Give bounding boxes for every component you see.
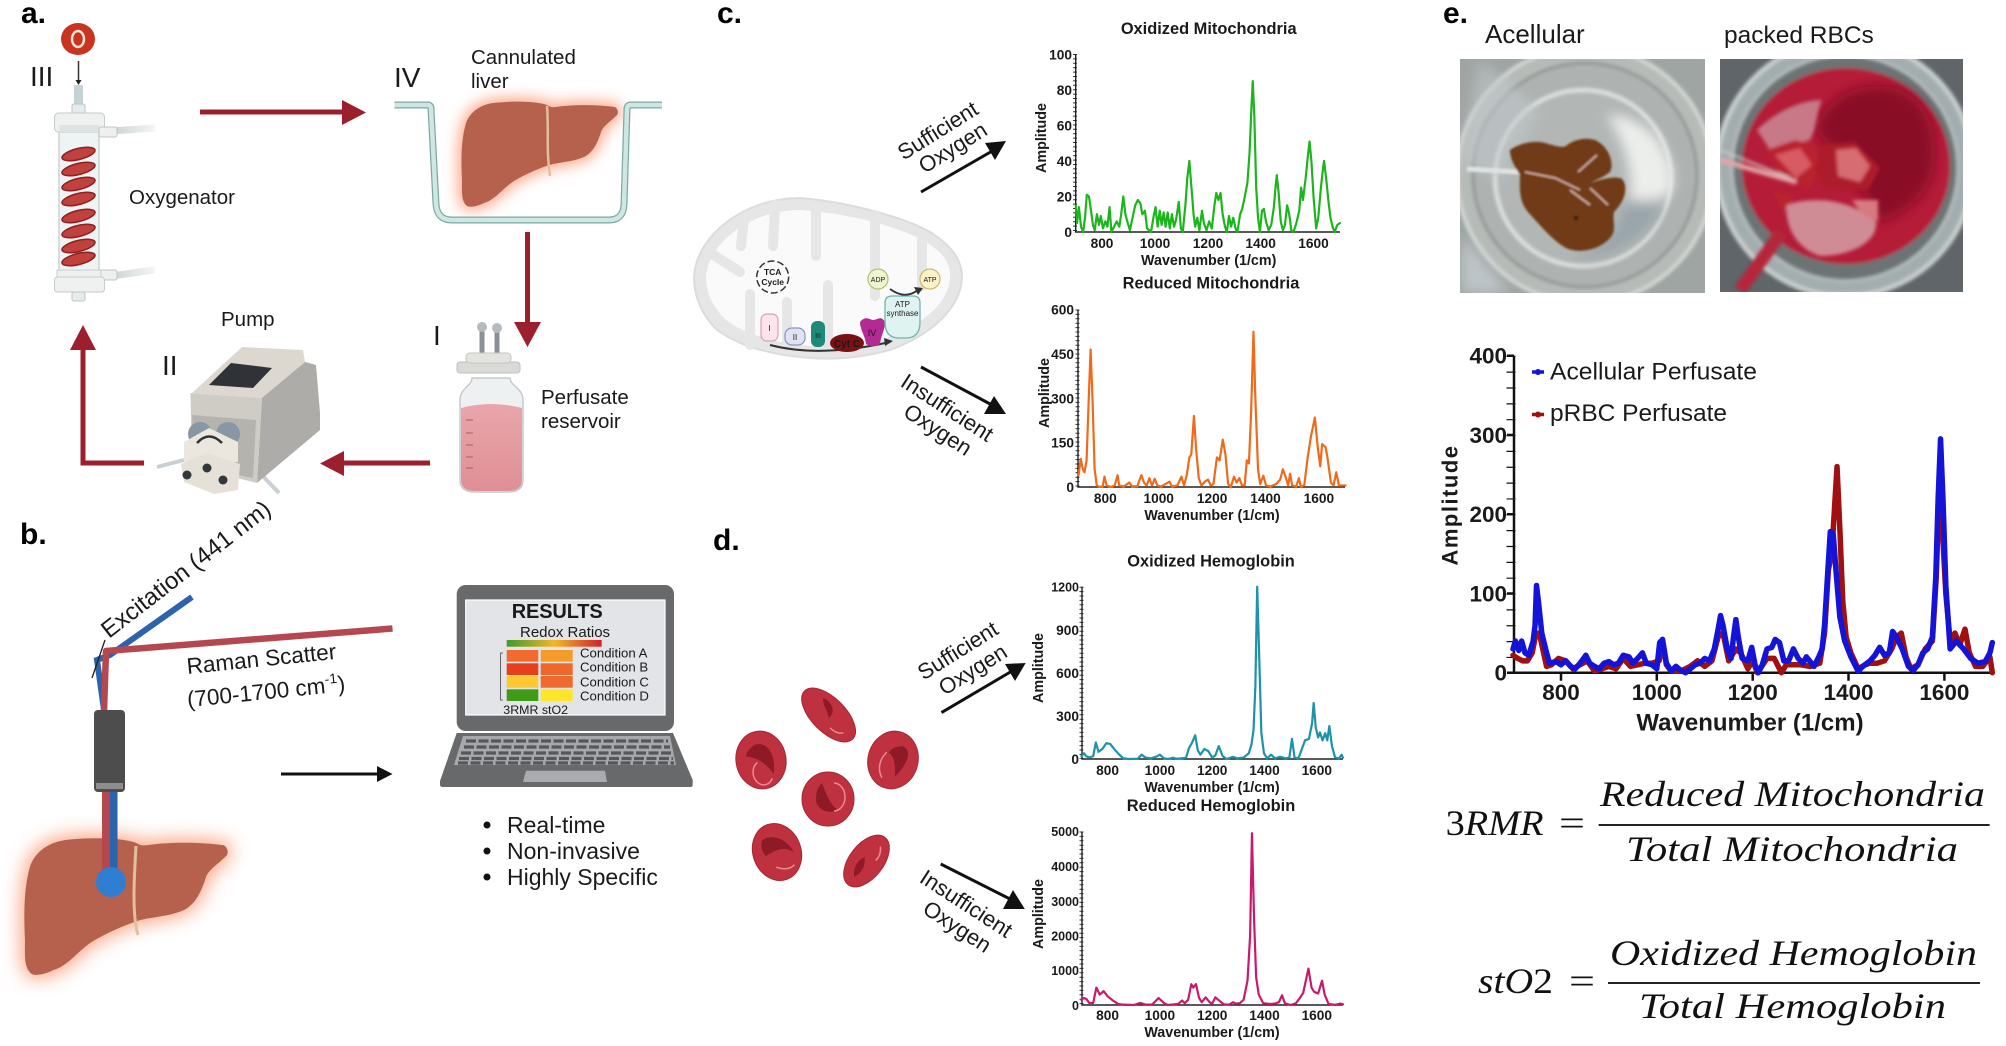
label Raman scatter: Raman Scatter bbox=[185, 639, 338, 679]
legend: Acellular Perfusate bbox=[1550, 358, 1757, 385]
chart: oxidized hemoglobin spectrum: 1200 bbox=[1197, 763, 1228, 778]
arrow: liver to reservoir bbox=[514, 232, 541, 347]
bullet list: Real-time bbox=[507, 812, 605, 838]
label sufficient oxygen: Oxygen bbox=[934, 639, 1012, 700]
panel d: hemoglobin spectra bbox=[713, 524, 1343, 1041]
bullet list: Highly Specific bbox=[507, 864, 658, 890]
panel a: perfusion circuit bbox=[21, 0, 662, 494]
chart: reduced hemoglobin spectrum: 800 bbox=[1096, 1008, 1119, 1023]
heatmap row labels bbox=[580, 645, 649, 704]
ADP to ATP arrow bbox=[890, 287, 923, 295]
label pump: Pump bbox=[221, 308, 275, 331]
chart: reduced hemoglobin spectrum: 1400 bbox=[1249, 1008, 1280, 1023]
icon: oxygenator column bbox=[54, 85, 155, 301]
bullet list bbox=[484, 812, 658, 890]
y tick labels: 0 bbox=[1494, 661, 1507, 686]
formula: stO2: Oxidized Hemoglobin bbox=[1610, 933, 1977, 973]
chart: reduced mitochondria spectrum: 450 bbox=[1051, 347, 1074, 362]
chart: oxidized mitochondria spectrum: 20 bbox=[1057, 190, 1072, 204]
chart: reduced hemoglobin spectrum: Wavenumber (1/cm) bbox=[1144, 1025, 1280, 1041]
heatmap bbox=[500, 650, 573, 701]
chart: reduced hemoglobin spectrum: 4000 bbox=[1051, 860, 1079, 874]
arrow: insufficient oxygen bbox=[921, 367, 1006, 414]
chart: reduced hemoglobin spectrum: 1200 bbox=[1197, 1008, 1228, 1023]
chart: reduced hemoglobin spectrum: 2000 bbox=[1051, 930, 1079, 944]
heatmap row labels: Condition B bbox=[580, 660, 648, 675]
label perfusate reservoir: Perfusate bbox=[541, 386, 629, 409]
chart: oxidized hemoglobin spectrum: 1600 bbox=[1302, 763, 1332, 778]
bullet list: Non-invasive bbox=[507, 838, 640, 864]
heading acellular: Acellular bbox=[1485, 19, 1585, 49]
y tick labels: 400 bbox=[1469, 344, 1507, 369]
arrow: sufficient oxygen bbox=[921, 141, 1006, 192]
panel label d: d. bbox=[713, 524, 740, 557]
x tick labels: 1400 bbox=[1823, 680, 1874, 705]
results heading: RESULTS bbox=[512, 601, 603, 623]
heatmap row labels: Condition A bbox=[580, 645, 648, 660]
chart: reduced hemoglobin spectrum: 0 bbox=[1072, 999, 1079, 1013]
ATP synthase: synthase bbox=[886, 309, 919, 318]
arrow: oxygenator to liver bbox=[200, 100, 366, 125]
formula: stO2: stO2 bbox=[1478, 961, 1553, 1001]
icon: peristaltic pump bbox=[157, 347, 320, 494]
heatmap row labels: Condition C bbox=[580, 674, 649, 689]
formula: stO2 bbox=[1478, 933, 1980, 1026]
icon: liver with probe spot bbox=[24, 792, 228, 975]
heading packed RBCs: packed RBCs bbox=[1724, 22, 1874, 49]
TCA cycle: Cycle bbox=[761, 277, 784, 287]
dark pool and reflections bbox=[1815, 86, 1935, 222]
chart: oxidized mitochondria spectrum: 1400 bbox=[1245, 236, 1276, 251]
label excitation: Excitation (441 nm) bbox=[96, 496, 276, 644]
chart: oxidized mitochondria spectrum: 0 bbox=[1064, 225, 1072, 240]
icon: tray bbox=[394, 105, 662, 220]
numeral II: II bbox=[162, 350, 178, 381]
chart: reduced hemoglobin spectrum bbox=[1031, 825, 1343, 1041]
numeral IV: IV bbox=[394, 62, 421, 93]
chart: reduced mitochondria spectrum: 1000 bbox=[1143, 491, 1174, 506]
chart: oxidized hemoglobin spectrum: 900 bbox=[1056, 623, 1079, 638]
label oxygenator: Oxygenator bbox=[129, 186, 235, 209]
y tick labels: 300 bbox=[1469, 423, 1507, 448]
chart: reduced hemoglobin spectrum: 1600 bbox=[1302, 1008, 1332, 1023]
major ticks bbox=[1507, 356, 1944, 681]
chart title: reduced mitochondria: Reduced Mitochondria bbox=[1123, 274, 1300, 292]
photo: acellular perfused liver bbox=[1460, 59, 1705, 293]
chart: oxidized mitochondria spectrum: Amplitude bbox=[1034, 103, 1050, 173]
chart: reduced hemoglobin spectrum: 1000 bbox=[1145, 1008, 1176, 1023]
arrow: insufficient oxygen bbox=[941, 864, 1025, 909]
legend bbox=[1532, 358, 1757, 427]
minor ticks bbox=[1506, 356, 1516, 673]
chart: oxidized mitochondria spectrum: 40 bbox=[1057, 154, 1072, 169]
x tick labels bbox=[1542, 680, 1969, 705]
chart: oxidized mitochondria spectrum: 60 bbox=[1057, 118, 1072, 134]
arrow: pump to oxygenator bbox=[70, 325, 144, 466]
icon: liver glow bbox=[24, 838, 228, 975]
ATP synthase bbox=[885, 296, 920, 338]
y tick labels bbox=[1469, 344, 1507, 686]
panel label b: b. bbox=[20, 518, 47, 551]
Raman scatter beam bbox=[104, 628, 392, 711]
electron transport arrow bbox=[770, 342, 890, 351]
chart: reduced mitochondria spectrum: Amplitude bbox=[1037, 358, 1053, 428]
photo: packed RBC perfused liver bbox=[1720, 59, 1963, 292]
arrow: reservoir to pump bbox=[320, 451, 430, 476]
complex III bbox=[811, 321, 825, 347]
blue series and red series bbox=[1513, 439, 1992, 673]
chart: oxidized mitochondria spectrum: 1000 bbox=[1140, 236, 1171, 251]
chart: oxidized mitochondria spectrum: 100 bbox=[1049, 48, 1072, 62]
numeral III: III bbox=[30, 61, 53, 92]
chart: oxidized mitochondria spectrum: 1600 bbox=[1298, 236, 1329, 251]
arrow: probe to laptop bbox=[281, 766, 392, 782]
heatmap row labels: Condition D bbox=[580, 689, 649, 704]
chart: reduced mitochondria spectrum: 600 bbox=[1051, 302, 1074, 318]
y tick labels: 100 bbox=[1469, 582, 1507, 606]
chart title: reduced hemoglobin: Reduced Hemoglobin bbox=[1127, 797, 1295, 815]
chart: oxidized hemoglobin spectrum: 0 bbox=[1071, 752, 1079, 767]
label cannulated liver: Cannulated bbox=[471, 46, 576, 69]
chart: oxidized mitochondria spectrum bbox=[1034, 48, 1340, 269]
chart: oxidized hemoglobin spectrum: 600 bbox=[1056, 666, 1079, 681]
TCA cycle: TCA bbox=[764, 267, 781, 277]
icon: oxygen source bbox=[61, 23, 95, 85]
x tick labels: 1000 bbox=[1632, 680, 1682, 705]
chart: reduced mitochondria spectrum: 1200 bbox=[1197, 491, 1228, 506]
chart: reduced mitochondria spectrum: Wavenumber (1/cm) bbox=[1144, 508, 1280, 524]
y axis title: Amplitude bbox=[1438, 444, 1463, 566]
chart: oxidized mitochondria spectrum: 80 bbox=[1057, 83, 1072, 98]
formula: 3RMR: Reduced Mitochondria bbox=[1599, 774, 1985, 814]
icon: probe body bbox=[94, 710, 125, 792]
x tick labels: 800 bbox=[1542, 680, 1580, 705]
complex III: III bbox=[815, 333, 821, 340]
icon: perfusate reservoir bottle bbox=[457, 322, 523, 492]
redox ratios label: Redox Ratios bbox=[520, 624, 610, 641]
chart: perfusate spectrum comparison bbox=[1438, 344, 1992, 737]
chart: oxidized hemoglobin spectrum: 800 bbox=[1096, 763, 1119, 778]
chart: reduced hemoglobin spectrum: 5000 bbox=[1051, 825, 1079, 839]
label Raman scatter: (700-1700 cm bbox=[186, 673, 326, 712]
label sufficient oxygen: Oxygen bbox=[914, 117, 992, 178]
chart: reduced mitochondria spectrum: 300 bbox=[1051, 392, 1074, 406]
ATP: ATP bbox=[923, 277, 937, 284]
icon: mitochondrion bbox=[694, 198, 962, 359]
chart title: oxidized hemoglobin: Oxidized Hemoglobin bbox=[1127, 552, 1295, 570]
label cannulated liver: liver bbox=[471, 70, 509, 93]
formula: 3RMR: Total Mitochondria bbox=[1626, 829, 1958, 869]
formula: stO2: = bbox=[1569, 961, 1595, 1001]
label insufficient oxygen: Insufficient bbox=[897, 369, 998, 447]
label insufficient oxygen: Oxygen bbox=[919, 895, 996, 958]
complex II bbox=[785, 328, 805, 345]
label Raman scatter: ) bbox=[336, 671, 346, 697]
numeral I: I bbox=[433, 320, 441, 351]
chart: reduced hemoglobin spectrum: 1000 bbox=[1051, 964, 1079, 978]
axes bbox=[1514, 356, 1992, 673]
formula: 3RMR: 3RMR bbox=[1446, 803, 1544, 843]
chart: oxidized hemoglobin spectrum: 300 bbox=[1056, 709, 1079, 724]
cytochrome c: Cyt C bbox=[834, 339, 860, 350]
chart: oxidized mitochondria spectrum: Wavenumber (1/cm) bbox=[1141, 253, 1277, 269]
y tick labels: 200 bbox=[1469, 502, 1507, 527]
gradient scale bar bbox=[507, 640, 602, 647]
chart: oxidized hemoglobin spectrum: Amplitude bbox=[1031, 633, 1047, 703]
ADP: ADP bbox=[871, 277, 886, 284]
x axis title: Wavenumber (1/cm) bbox=[1636, 710, 1864, 737]
label insufficient oxygen: Insufficient bbox=[916, 865, 1017, 943]
panel b: Raman probe and readout bbox=[20, 496, 693, 975]
chart: reduced mitochondria spectrum: 0 bbox=[1066, 480, 1074, 495]
complex I: I bbox=[768, 324, 771, 333]
chart: reduced mitochondria spectrum: 1600 bbox=[1304, 491, 1335, 506]
label sufficient oxygen: Sufficient bbox=[913, 616, 1003, 685]
dichroic mirror bbox=[92, 640, 105, 678]
chart: reduced mitochondria spectrum: 1400 bbox=[1250, 491, 1281, 506]
formula: 3RMR: = bbox=[1559, 803, 1585, 843]
chart: reduced mitochondria spectrum: 150 bbox=[1051, 436, 1074, 450]
panel c: mitochondria spectra bbox=[694, 0, 1346, 524]
label insufficient oxygen: Oxygen bbox=[899, 398, 976, 461]
complex II: II bbox=[793, 333, 797, 342]
formula: 3RMR bbox=[1446, 774, 1990, 869]
ADP bbox=[868, 269, 888, 289]
chart: reduced mitochondria spectrum bbox=[1037, 302, 1346, 524]
formula: stO2: Total Hemoglobin bbox=[1639, 986, 1946, 1026]
excitation beam bbox=[97, 597, 192, 710]
panel e: photos, combined spectrum, formulas bbox=[1438, 0, 1992, 1026]
x tick labels: 1200 bbox=[1728, 680, 1778, 705]
chart: reduced hemoglobin spectrum: Amplitude bbox=[1031, 879, 1047, 949]
ATP synthase: ATP bbox=[895, 300, 910, 309]
arrow: sufficient oxygen bbox=[942, 663, 1026, 713]
label Raman scatter bbox=[182, 638, 346, 712]
heatmap column labels: 3RMR stO2 bbox=[503, 703, 568, 717]
chart: oxidized hemoglobin spectrum: 1400 bbox=[1249, 763, 1280, 778]
chart: reduced mitochondria spectrum: 800 bbox=[1094, 491, 1117, 506]
label perfusate reservoir: reservoir bbox=[541, 410, 621, 433]
chart: oxidized hemoglobin spectrum: Wavenumber (1/cm) bbox=[1144, 780, 1280, 796]
chart title: oxidized mitochondria: Oxidized Mitochondria bbox=[1121, 20, 1297, 38]
icon: liver glow bbox=[461, 102, 618, 207]
chart: oxidized mitochondria spectrum: 1200 bbox=[1193, 236, 1224, 251]
ATP bbox=[920, 269, 940, 289]
legend: pRBC Perfusate bbox=[1550, 400, 1727, 427]
label Raman scatter: -1 bbox=[324, 670, 338, 687]
x tick labels: 1600 bbox=[1919, 680, 1969, 705]
tray inner tone bbox=[394, 105, 662, 220]
icon: red blood cells bbox=[731, 679, 925, 895]
cytochrome c bbox=[830, 334, 864, 352]
chart: oxidized hemoglobin spectrum: 1000 bbox=[1145, 763, 1176, 778]
arrow head bbox=[884, 338, 893, 346]
label sufficient oxygen: Sufficient bbox=[893, 96, 983, 165]
icon: cannulated liver bbox=[461, 102, 618, 207]
TCA cycle bbox=[757, 261, 789, 293]
chart: oxidized hemoglobin spectrum: 1200 bbox=[1051, 581, 1079, 595]
complex IV bbox=[860, 318, 885, 346]
icon: laptop with results bbox=[440, 585, 693, 787]
complex IV: IV bbox=[868, 328, 876, 338]
complex I bbox=[761, 314, 778, 341]
chart: oxidized mitochondria spectrum: 800 bbox=[1091, 236, 1114, 251]
chart: reduced hemoglobin spectrum: 3000 bbox=[1051, 895, 1079, 909]
chart: oxidized hemoglobin spectrum bbox=[1031, 581, 1343, 796]
